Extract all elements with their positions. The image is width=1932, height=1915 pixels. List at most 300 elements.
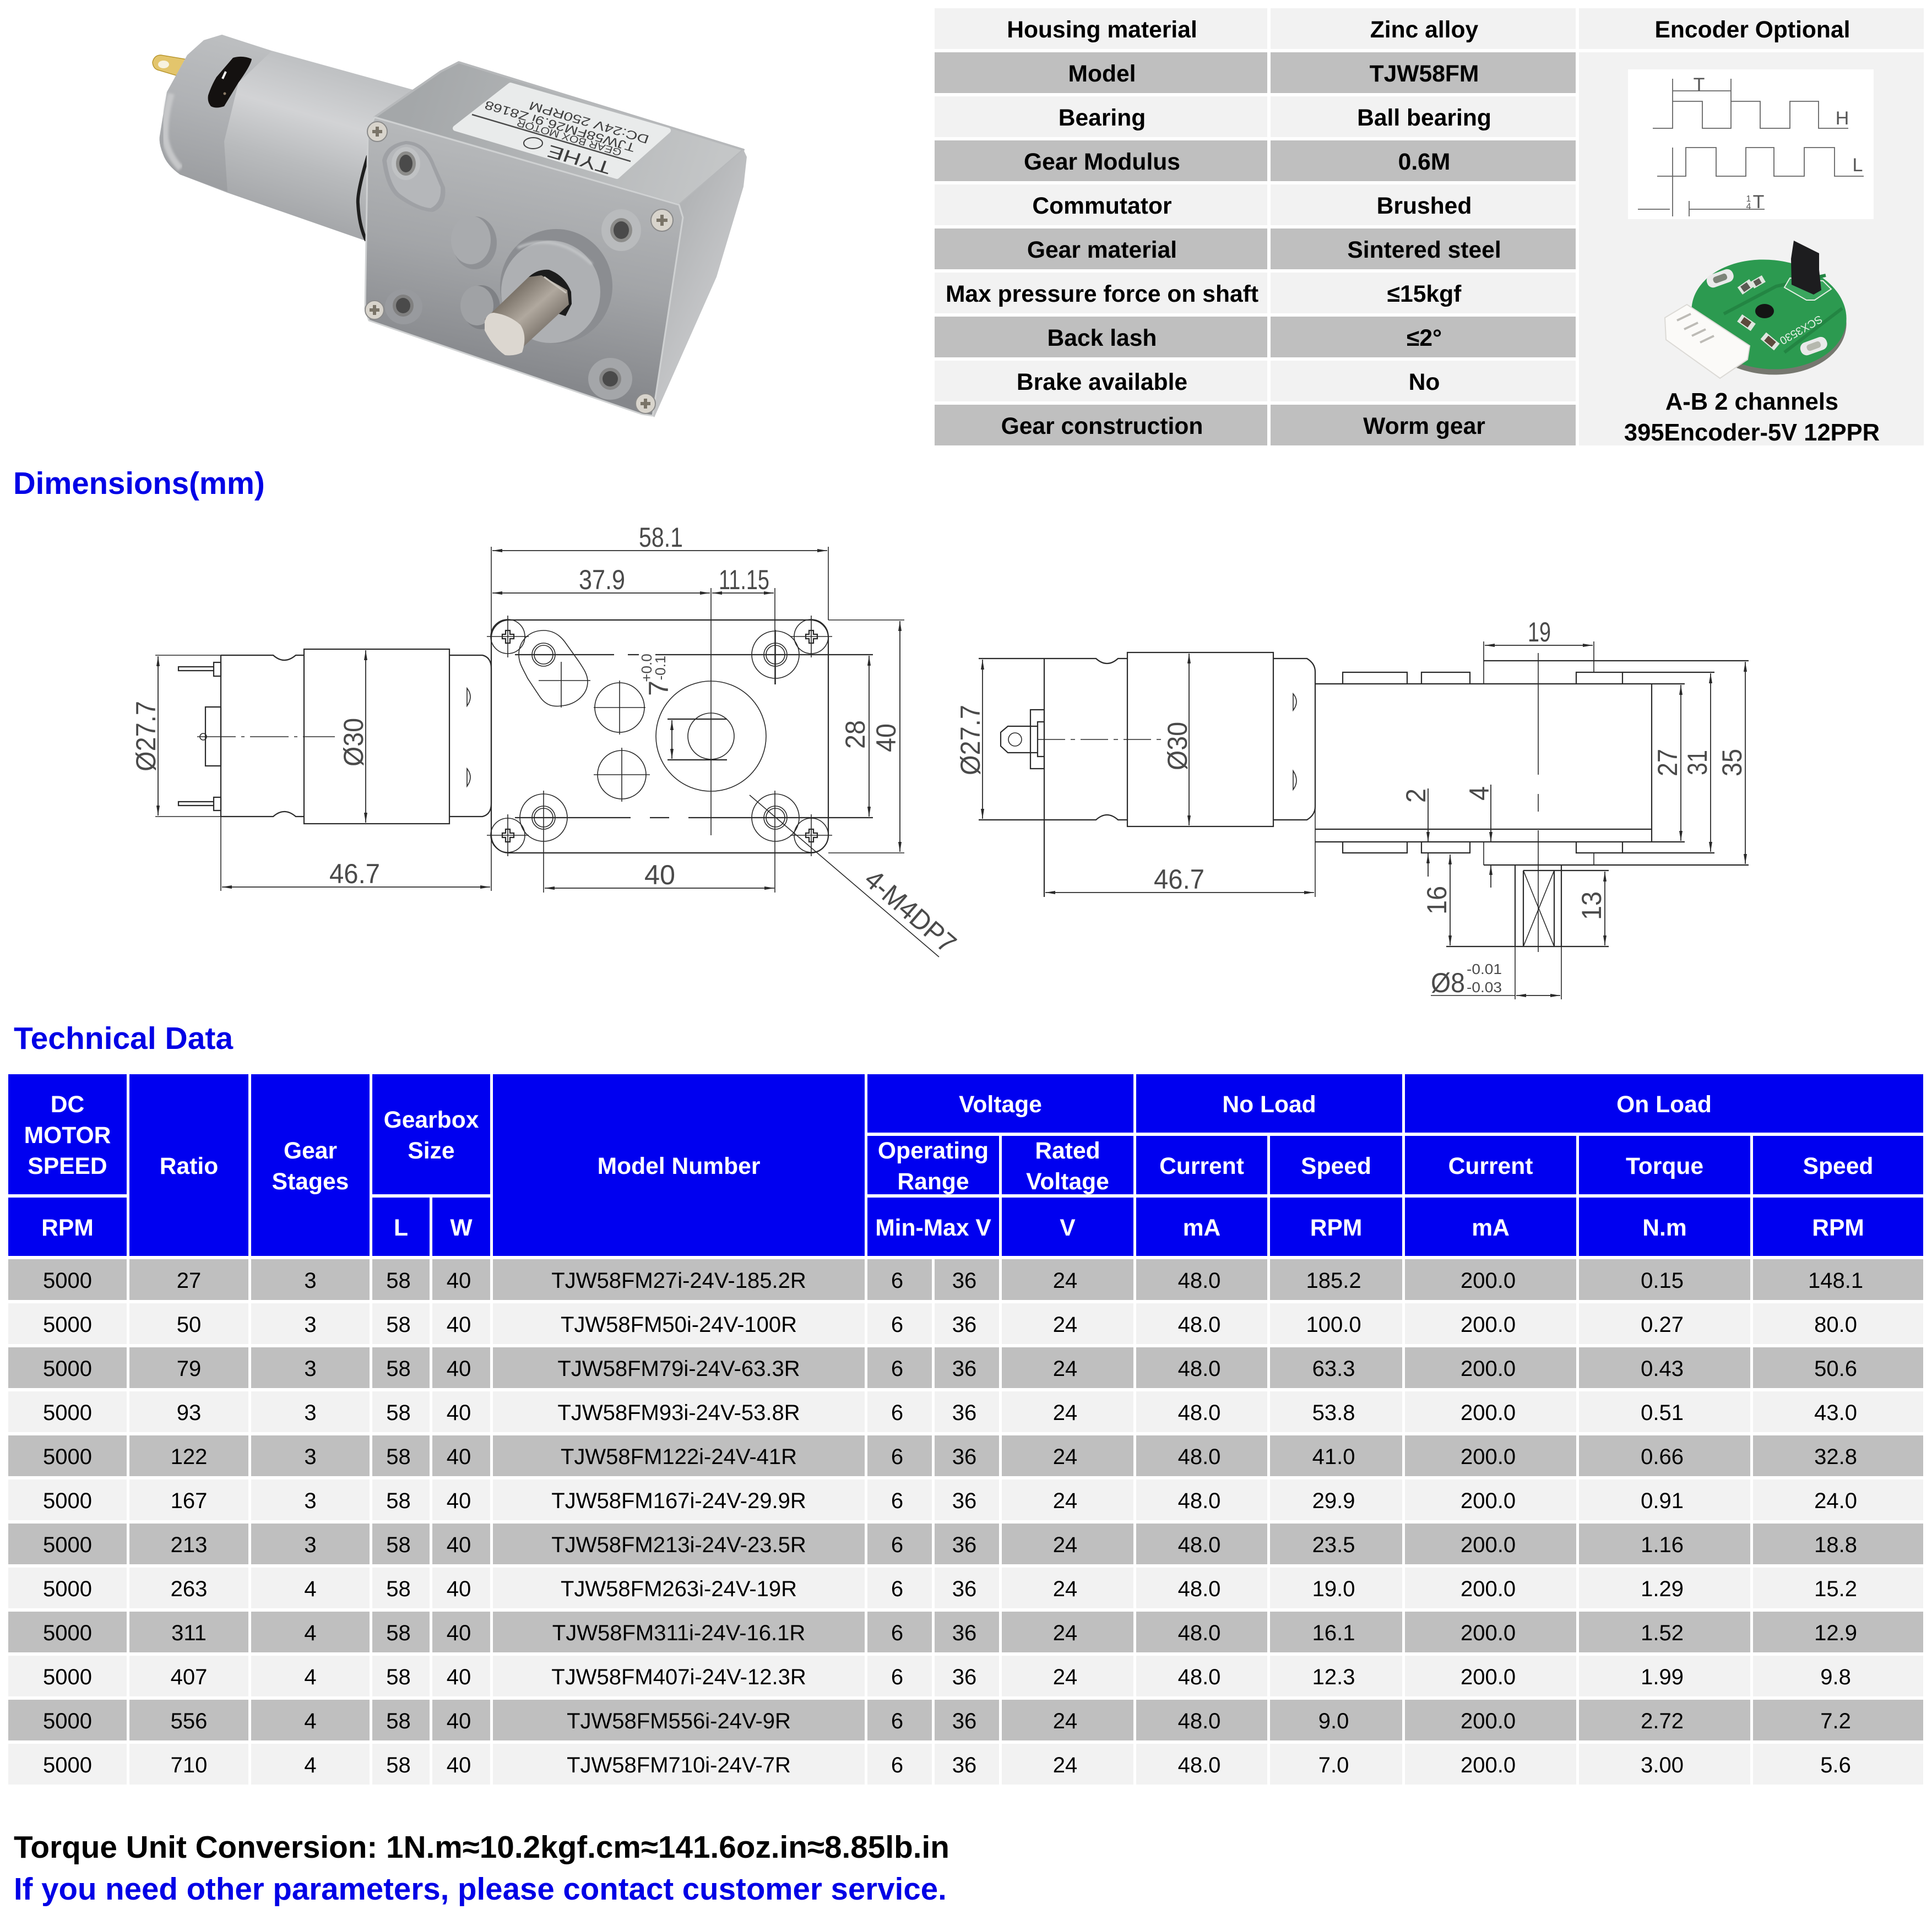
data row: ratio 167: 58 [386,1489,411,1513]
spec row: brake: No [1409,369,1440,395]
data row: ratio 50: 50 [177,1313,201,1337]
header pad [1784,278,1831,300]
dimension: 4: 4 [1464,786,1495,801]
data row: ratio 311: 4 [304,1621,317,1645]
dimension: 2: 2 [1401,788,1431,803]
spec row: commutator: Commutator [1032,193,1172,219]
data row: ratio 311: 16.1 [1312,1621,1355,1645]
gearbox side face [653,150,747,417]
data row: ratio 311 [8,1612,1923,1652]
dimension: 31: 31 [1682,750,1713,775]
data row: ratio 93: 40 [447,1401,471,1425]
spec row: back lash: Back lash [1048,325,1157,351]
data row: ratio 556: 36 [952,1709,976,1733]
spec row: gear material: Gear material [1027,237,1177,263]
spec row: model [935,52,1924,446]
mounting slots [1705,268,1735,289]
quarter period marker: 4 [1746,202,1751,211]
channel H waveform [1653,101,1849,129]
header row: units: RPM [1310,1215,1362,1241]
encoder board photo [1660,237,1850,385]
data row: ratio 710: 3.00 [1641,1753,1684,1777]
data row: ratio 79: 200.0 [1461,1357,1516,1381]
data row: ratio 556: 200.0 [1461,1709,1516,1733]
data row: ratio 556: 6 [891,1709,903,1733]
data row: ratio 27: 148.1 [1808,1269,1863,1293]
dimension: 7 tolerance: +0.0 [638,654,655,682]
data row: ratio 311: 5000 [43,1621,92,1645]
data row: ratio 167: 24 [1053,1489,1077,1513]
data row: ratio 122: 32.8 [1814,1445,1857,1469]
spec row: commutator: Brushed [1377,193,1472,219]
data row: ratio 263: 4 [304,1577,317,1601]
period T marker: T [1694,74,1705,95]
spec row: back lash [935,317,1924,357]
dimension: 46.7: 46.7 [1154,864,1204,895]
data row: ratio 263: 36 [952,1577,976,1601]
data row: ratio 50: 6 [891,1313,903,1337]
mounting holes [385,147,641,400]
data row: ratio 27 [8,1259,1923,1300]
data row: ratio 50: 80.0 [1814,1313,1857,1337]
dimension: shaft diameter 8: -0.03 [1467,979,1502,995]
gear bumps and output shaft circle [594,681,766,802]
header row: groups: Stages [272,1168,349,1195]
spec row: housing material: Encoder Optional [1654,17,1850,43]
data row: ratio 93: 53.8 [1312,1401,1355,1425]
dimension: 35: 35 [1717,749,1748,776]
data row: ratio 710: 5.6 [1820,1753,1851,1777]
data row: ratio 407: 24 [1053,1665,1077,1689]
header row: parameters: Voltage [1026,1168,1109,1195]
gearbox front face [365,117,683,416]
data row: ratio 407: 200.0 [1461,1665,1516,1689]
data row: ratio 263: 5000 [43,1577,92,1601]
header row: groups: Gear [284,1138,337,1164]
header row: groups: Ratio [160,1153,218,1179]
data row: ratio 556: 556 [171,1709,207,1733]
data row: ratio 263: 48.0 [1178,1577,1220,1601]
dimension: 46.7: 46.7 [329,858,380,889]
data row: ratio 710: 40 [447,1753,471,1777]
data row: ratio 27: 185.2 [1306,1269,1361,1293]
header row: parameters: Operating [878,1138,989,1164]
specification table [935,8,1924,446]
corner screws [487,616,832,856]
channel L waveform [1657,148,1864,176]
dimension: shaft diameter 8 [1431,961,1560,998]
spec row: bearing: Ball bearing [1357,105,1491,131]
data row: ratio 710: 6 [891,1753,903,1777]
header row: groups: Size [408,1138,455,1164]
data row: ratio 263: 24 [1053,1577,1077,1601]
data row: ratio 79: 50.6 [1814,1357,1857,1381]
quarter period marker: 1 [1746,194,1751,204]
motor body side view [979,652,1315,897]
data row: ratio 407: 1.99 [1641,1665,1684,1689]
data row: ratio 122: 3 [304,1445,317,1469]
data row: ratio 556: 40 [447,1709,471,1733]
data row: ratio 93: 43.0 [1814,1401,1857,1425]
data row: ratio 50: 58 [386,1313,411,1337]
data row: ratio 213: TJW58FM213i-24V-23.5R [551,1533,806,1557]
data row: ratio 79: 0.43 [1641,1357,1684,1381]
data row: ratio 50: 200.0 [1461,1313,1516,1337]
data row: ratio 710: TJW58FM710i-24V-7R [567,1753,791,1777]
data row: ratio 27: 27 [177,1269,201,1293]
dimension: diameter 27.7: Ø27.7 [131,701,161,771]
data row: ratio 93: 24 [1053,1401,1077,1425]
header row: units: Min-Max V [875,1215,991,1241]
data row: ratio 122: 5000 [43,1445,92,1469]
mounting bosses [519,630,799,841]
data row: ratio 93: 58 [386,1401,411,1425]
dimension: shaft diameter 8: Ø8 [1431,967,1465,998]
header row: parameters: Speed [1301,1153,1371,1179]
data row: ratio 167: 6 [891,1489,903,1513]
data row: ratio 213: 24 [1053,1533,1077,1557]
data row: ratio 213: 23.5 [1312,1533,1355,1557]
data row: ratio 311: 200.0 [1461,1621,1516,1645]
spec row: gear modulus: 0.6M [1398,149,1450,175]
dimension: 37.9: 37.9 [579,564,625,595]
surface components [1738,279,1754,295]
data row: ratio 50: 40 [447,1313,471,1337]
spec row: housing material: A-B 2 channels [1665,389,1838,415]
black header pins [1791,241,1821,295]
data row: ratio 710: 7.0 [1318,1753,1349,1777]
data row: ratio 213: 213 [171,1533,207,1557]
data row: ratio 213: 1.16 [1641,1533,1684,1557]
data row: ratio 93: 0.51 [1641,1401,1684,1425]
data row: ratio 167: 29.9 [1312,1489,1355,1513]
technical data table [6,1071,1926,1788]
data row: ratio 556: 48.0 [1178,1709,1220,1733]
data row: ratio 50: 36 [952,1313,976,1337]
data row: ratio 93: 36 [952,1401,976,1425]
data row: ratio 50 [8,1303,1923,1344]
data row: ratio 556: 2.72 [1641,1709,1684,1733]
data row: ratio 263: 6 [891,1577,903,1601]
data row: ratio 167: 0.91 [1641,1489,1684,1513]
data row: ratio 213: 6 [891,1533,903,1557]
data row: ratio 263: 1.29 [1641,1577,1684,1601]
spec row: housing material [935,8,1924,446]
data row: ratio 311: 1.52 [1641,1621,1684,1645]
data row: ratio 27: 6 [891,1269,903,1293]
data row: ratio 556: 4 [304,1709,317,1733]
spec row: gear material [935,229,1576,269]
data row: ratio 213: 40 [447,1533,471,1557]
data row: ratio 311: 40 [447,1621,471,1645]
header row: parameters: Speed [1803,1153,1873,1179]
label text: gear box motor: GEAR BOX MOTOR [515,117,623,158]
header row: parameters: Range [897,1168,969,1195]
header row: units: V [1060,1215,1076,1241]
spec row: gear modulus: Gear Modulus [1024,149,1180,175]
data row: ratio 263 [8,1568,1923,1608]
data row: ratio 167: 48.0 [1178,1489,1220,1513]
data row: ratio 556: 58 [386,1709,411,1733]
data row: ratio 93: TJW58FM93i-24V-53.8R [557,1401,800,1425]
data row: ratio 407: 5000 [43,1665,92,1689]
data row: ratio 79: 40 [447,1357,471,1381]
data row: ratio 407: 4 [304,1665,317,1689]
dimension: 7 tolerance [638,654,674,696]
spec row: housing material: Zinc alloy [1370,17,1478,43]
drawing: front view with dimensions [131,522,962,959]
data row: ratio 93: 200.0 [1461,1401,1516,1425]
data row: ratio 27: 40 [447,1269,471,1293]
data row: ratio 213: 5000 [43,1533,92,1557]
note: contact customer service: If you need other parameters, please contact customer service. [14,1872,947,1906]
data row: ratio 93: 93 [177,1401,201,1425]
data row: ratio 710 [8,1744,1923,1785]
data row: ratio 710: 24 [1053,1753,1077,1777]
spec row: model: Model [1068,61,1136,87]
spec row: gear material: Sintered steel [1347,237,1501,263]
data row: ratio 263: 263 [171,1577,207,1601]
header row: units: N.m [1642,1215,1687,1241]
spec row: model: TJW58FM [1370,61,1479,87]
data row: ratio 27: 58 [386,1269,411,1293]
spec row: gear modulus [935,140,1576,181]
data row: ratio 93 [8,1391,1923,1432]
data row: ratio 50: TJW58FM50i-24V-100R [561,1313,797,1337]
header row: units [8,1198,1923,1256]
dimension: 16: 16 [1421,886,1452,915]
data row: ratio 710: 710 [171,1753,207,1777]
data row: ratio 93: 3 [304,1401,317,1425]
data row: ratio 122: 40 [447,1445,471,1469]
data row: ratio 556: 24 [1053,1709,1077,1733]
data row: ratio 79: 63.3 [1312,1357,1355,1381]
header row: groups [8,1074,1923,1785]
data row: ratio 122: 0.66 [1641,1445,1684,1469]
gearbox side outline [1315,641,1749,952]
data row: ratio 27: 36 [952,1269,976,1293]
data row: ratio 213: 200.0 [1461,1533,1516,1557]
dimension: 40 height: 40 [871,723,902,752]
data row: ratio 263: 58 [386,1577,411,1601]
data row: ratio 27: 200.0 [1461,1269,1516,1293]
data row: ratio 167: TJW58FM167i-24V-29.9R [551,1489,806,1513]
motor terminal [153,55,191,81]
data row: ratio 27: 3 [304,1269,317,1293]
note: torque unit conversion: Torque Unit Conversion: 1N.m≈10.2kgf.cm≈141.6oz.in≈8.85lb.in [14,1830,949,1865]
header row: units: mA [1183,1215,1220,1241]
data row: ratio 556: 5000 [43,1709,92,1733]
period T marker [1673,74,1731,101]
data row: ratio 407: TJW58FM407i-24V-12.3R [551,1665,806,1689]
dimension: diameter 30: Ø30 [338,718,369,766]
data row: ratio 79: 5000 [43,1357,92,1381]
motor can [160,35,413,241]
quarter period marker [1638,148,1765,216]
data row: ratio 263: TJW58FM263i-24V-19R [561,1577,797,1601]
data row: ratio 167: 24.0 [1814,1489,1857,1513]
data row: ratio 50: 24 [1053,1313,1077,1337]
data row: ratio 93: 6 [891,1401,903,1425]
data row: ratio 167: 40 [447,1489,471,1513]
header row: parameters: Rated [1035,1138,1100,1164]
spec row: brake [935,361,1924,401]
data row: ratio 27: TJW58FM27i-24V-185.2R [551,1269,806,1293]
registered mark [524,138,542,149]
data row: ratio 263: 40 [447,1577,471,1601]
data row: ratio 79: 36 [952,1357,976,1381]
callout: 4-M4DP7: 4-M4DP7 [859,863,962,959]
data row: ratio 407: 407 [171,1665,207,1689]
data row: ratio 79: 24 [1053,1357,1077,1381]
data row: ratio 213: 48.0 [1178,1533,1220,1557]
data row: ratio 122: 36 [952,1445,976,1469]
spec row: back lash: ≤2° [1407,325,1442,351]
spec row: gear construction [935,405,1924,445]
data row: ratio 27: 24 [1053,1269,1077,1293]
data row: ratio 407: 58 [386,1665,411,1689]
data row: ratio 556 [8,1700,1923,1740]
spec row: gear construction: Gear construction [1001,413,1203,439]
data row: ratio 79: 3 [304,1357,317,1381]
data row: ratio 311: 6 [891,1621,903,1645]
data row: ratio 263: 15.2 [1814,1577,1857,1601]
gear housing gap [358,156,368,241]
encoder waveform diagram [1628,69,1874,219]
corner screws [365,122,673,414]
data row: ratio 122: 122 [171,1445,207,1469]
dimension: 27: 27 [1652,749,1683,776]
header row: groups: Voltage [959,1091,1042,1118]
white connector [1665,304,1750,378]
dimension: diameter 30: Ø30 [1162,722,1193,770]
data row: ratio 50: 48.0 [1178,1313,1220,1337]
header row: parameters: Current [1159,1153,1244,1179]
data row: ratio 167: 5000 [43,1489,92,1513]
spec row: max pressure force: Max pressure force on shaft [946,281,1258,307]
output shaft [1446,865,1609,999]
data row: ratio 263: 200.0 [1461,1577,1516,1601]
dimension: 58.1: 58.1 [639,522,683,553]
data row: ratio 407: 9.8 [1820,1665,1851,1689]
data row: ratio 213: 18.8 [1814,1533,1857,1557]
data row: ratio 213: 3 [304,1533,317,1557]
header row: units: RPM [1812,1215,1864,1241]
dimension: shaft diameter 8: -0.01 [1467,961,1502,977]
data row: ratio 27: 48.0 [1178,1269,1220,1293]
data row: ratio 122: 200.0 [1461,1445,1516,1469]
header row: groups: Model Number [598,1153,760,1179]
header row: groups: No Load [1222,1091,1316,1118]
spec row: max pressure force: ≤15kgf [1387,281,1461,307]
dimension: 7 tolerance: 7 [643,681,674,696]
data row: ratio 93: 5000 [43,1401,92,1425]
header row: units: W [450,1215,473,1241]
data row: ratio 50: 100.0 [1306,1313,1361,1337]
data row: ratio 93: 48.0 [1178,1401,1220,1425]
header row: groups: Gearbox [384,1107,479,1133]
heading: dimensions: Dimensions(mm) [13,466,265,500]
header row: parameters: Current [1448,1153,1533,1179]
brand TYHE: TYHE [545,141,614,178]
ventilation slot [208,57,252,108]
data row: ratio 167: 36 [952,1489,976,1513]
data row: ratio 710: 200.0 [1461,1753,1516,1777]
label text: rating: DC:24V 250RPM [527,99,651,146]
cast bumps [453,216,497,269]
header row: groups: SPEED [28,1153,107,1179]
data row: ratio 556: 7.2 [1820,1709,1851,1733]
header row: groups: DC [51,1091,84,1118]
data row: ratio 50: 5000 [43,1313,92,1337]
gearbox outline [491,547,904,893]
dimension: 11.15: 11.15 [719,564,769,595]
data row: ratio 122: 48.0 [1178,1445,1220,1469]
data row: ratio 122: 58 [386,1445,411,1469]
dimension: 28: 28 [840,720,871,749]
spec row: brake: Brake available [1017,369,1187,395]
board marking: SCX3530 [1777,313,1824,347]
gearbox top face [375,62,744,205]
channel L waveform: L [1853,155,1863,176]
callout: 4-M4DP7 [750,795,962,959]
spec row: max pressure force [935,273,1924,313]
data row: ratio 213: 36 [952,1533,976,1557]
output boss [500,229,612,344]
data row: ratio 167 [8,1479,1923,1520]
data row: ratio 556: 9.0 [1318,1709,1349,1733]
data row: ratio 79 [8,1347,1923,1388]
header row: parameters: Torque [1626,1153,1703,1179]
data row: ratio 556: TJW58FM556i-24V-9R [567,1709,791,1733]
product photo: worm gear motor [152,35,747,417]
data row: ratio 79: 48.0 [1178,1357,1220,1381]
spec row: gear construction: Worm gear [1363,413,1485,439]
drawing: side view with dimensions [958,617,1749,999]
data row: ratio 311: 311 [171,1621,207,1645]
header row: units: RPM [41,1215,94,1241]
dimension: 40 width: 40 [644,859,675,890]
data row: ratio 50: 3 [304,1313,317,1337]
header row: parameters [8,1136,1923,1194]
data row: ratio 122: 24 [1053,1445,1077,1469]
spec row: housing material: Housing material [1007,17,1197,43]
data row: ratio 50: 0.27 [1641,1313,1684,1337]
data row: ratio 27: 0.15 [1641,1269,1684,1293]
data row: ratio 213 [8,1524,1923,1564]
data row: ratio 710: 48.0 [1178,1753,1220,1777]
data row: ratio 407: 6 [891,1665,903,1689]
data row: ratio 311: 12.9 [1814,1621,1857,1645]
header row: groups: MOTOR [24,1122,111,1149]
data row: ratio 407: 12.3 [1312,1665,1355,1689]
label text: model code: TJW58FM26.9i Z8168 [483,98,637,155]
dimension: 19: 19 [1528,617,1551,648]
data row: ratio 213: 58 [386,1533,411,1557]
data row: ratio 311: 48.0 [1178,1621,1220,1645]
heading: technical data: Technical Data [14,1021,233,1056]
data row: ratio 79: TJW58FM79i-24V-63.3R [557,1357,800,1381]
data row: ratio 311: 24 [1053,1621,1077,1645]
data row: ratio 710: 36 [952,1753,976,1777]
data row: ratio 710: 4 [304,1753,317,1777]
motor body side view [155,649,491,891]
data row: ratio 407: 40 [447,1665,471,1689]
data row: ratio 122: TJW58FM122i-24V-41R [561,1445,797,1469]
data row: ratio 710: 58 [386,1753,411,1777]
quarter period marker: T [1753,192,1764,213]
oblong boss [382,141,446,212]
